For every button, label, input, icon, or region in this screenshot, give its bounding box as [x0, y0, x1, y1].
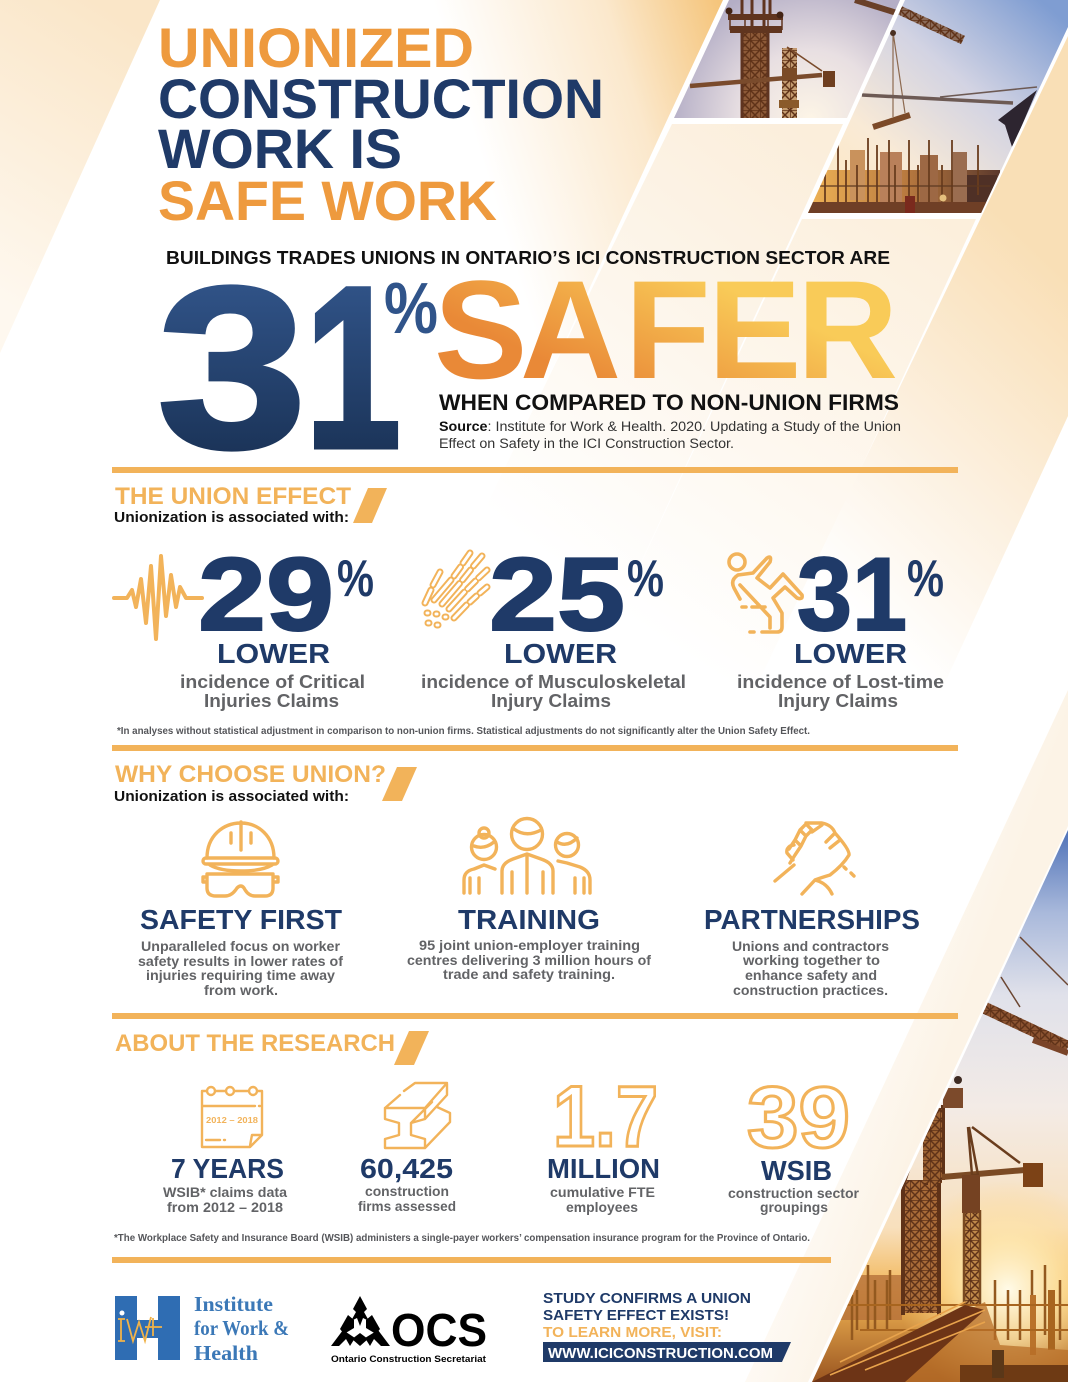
logo: Institute for Work and Health: for Work &	[194, 1316, 289, 1340]
footnote: WSIB definition: *The Workplace Safety and Insurance Board (WSIB) administers a single-payer workers’ compensation insurance program for the Province of Ontario.	[114, 1233, 810, 1244]
call to action: WWW.ICICONSTRUCTION.COM	[548, 1346, 773, 1362]
stat: 29% lower critical injuries	[114, 537, 374, 711]
call to action: TO LEARN MORE, VISIT:	[543, 1325, 722, 1341]
stat: 1.7 million: 1.7	[553, 1069, 658, 1165]
panel: safety first: from work.	[204, 982, 278, 998]
icon: hard hat and goggles	[203, 822, 278, 896]
section heading: why choose union: WHY CHOOSE UNION?	[115, 761, 386, 788]
stat: 1.7 million: MILLION	[547, 1153, 660, 1184]
stat: 29% lower critical injuries: 29	[198, 537, 334, 653]
photo: crane lifting a beam over building site	[805, 0, 1068, 215]
stat: firms assessed: firms assessed	[358, 1198, 456, 1214]
panel: partnerships	[704, 823, 920, 998]
icon: seismic pulse	[114, 556, 202, 639]
panel: training	[407, 818, 651, 982]
logo: Institute for Work and Health	[115, 1292, 289, 1365]
stat: 1.7 million: cumulative FTE	[550, 1184, 655, 1200]
call to action: SAFETY EFFECT EXISTS!	[543, 1308, 729, 1324]
stat: 25% lower musculoskeletal injuries: LOWER	[504, 638, 617, 669]
stat: firms assessed: construction	[365, 1183, 449, 1199]
stat: 7 years: 2012 – 2018	[206, 1115, 258, 1125]
icon: clasped hands	[775, 823, 854, 894]
stat: 29% lower critical injuries: Injuries Claims	[204, 690, 339, 711]
logo: Ontario Construction Secretariat	[331, 1296, 487, 1365]
panel: training: centres delivering 3 million hours of	[407, 952, 651, 968]
stat: 7 years: WSIB* claims data	[163, 1184, 287, 1200]
panel: partnerships: working together to	[742, 952, 880, 968]
panel: training: trade and safety training.	[443, 966, 615, 982]
stat: 29% lower critical injuries: incidence of Critical	[180, 671, 365, 692]
headline statistic: 31% safer: 1	[305, 239, 401, 496]
stat: 25% lower musculoskeletal injuries: Injury Claims	[491, 690, 611, 711]
panel: partnerships: Unions and contractors	[732, 938, 889, 954]
stat: 7 years	[163, 1087, 287, 1215]
section heading: the union effect: THE UNION EFFECT	[115, 483, 351, 510]
panel: safety first: SAFETY FIRST	[140, 904, 342, 935]
stat: firms assessed	[358, 1083, 456, 1214]
stat: 31% lower lost-time injuries: %	[907, 550, 944, 608]
footnote: statistical adjustment: *In analyses without statistical adjustment in comparison to non-union firms. Statistical adjustments do not significantly alter the Union Safety Effect.	[117, 726, 810, 737]
divider	[112, 745, 958, 751]
divider	[112, 1257, 831, 1263]
stat: 31% lower lost-time injuries: 31	[797, 537, 907, 653]
stat: 1.7 million	[547, 1069, 660, 1215]
photo: cranes at sunset on building site	[800, 825, 1068, 1382]
divider	[112, 1013, 958, 1019]
stat: 29% lower critical injuries: LOWER	[217, 638, 330, 669]
subheading: BUILDINGS TRADES UNIONS IN ONTARIO’S ICI CONSTRUCTION SECTOR ARE	[166, 248, 890, 268]
title: SAFE WORK	[158, 169, 497, 232]
stat: 29% lower critical injuries: %	[337, 550, 374, 608]
stat: 39 WSIB groupings: 39	[747, 1070, 850, 1166]
icon: steel I-beam	[385, 1083, 450, 1148]
section heading: about the research	[115, 1030, 429, 1065]
stat: 31% lower lost-time injuries: LOWER	[794, 638, 907, 669]
icon: calendar	[202, 1087, 262, 1147]
panel: safety first: injuries requiring time away	[146, 967, 335, 983]
title: WORK IS	[158, 117, 402, 180]
logo: Institute for Work and Health: Health	[194, 1341, 258, 1365]
panel: partnerships: enhance safety and	[745, 967, 877, 983]
section heading: why choose union	[114, 761, 417, 805]
stat: 39 WSIB groupings: construction sector	[728, 1185, 860, 1201]
headline statistic: 31% safer: 3	[157, 239, 307, 496]
title: CONSTRUCTION	[158, 67, 604, 130]
logo: Ontario Construction Secretariat: Ontario Construction Secretariat	[331, 1354, 487, 1365]
panel: training: TRAINING	[458, 904, 600, 935]
source note: Effect on Safety in the ICI Construction Sector.	[439, 436, 734, 451]
logo: Ontario Construction Secretariat: OCS	[391, 1304, 487, 1356]
logo: Institute for Work and Health: Institute	[194, 1292, 273, 1316]
divider	[112, 467, 958, 473]
panel: safety first: Unparalleled focus on worker	[141, 938, 341, 954]
photo: tower cranes against sky	[670, 0, 905, 120]
section heading: why choose union: Unionization is associated with:	[114, 788, 349, 805]
call to action	[543, 1291, 791, 1362]
stat: 25% lower musculoskeletal injuries	[421, 537, 686, 711]
headline statistic: 31% safer: SAFER	[434, 251, 898, 408]
stat: 31% lower lost-time injuries	[729, 537, 944, 711]
icon: hand skeleton	[425, 553, 487, 625]
stat: 25% lower musculoskeletal injuries: 25	[489, 537, 625, 653]
stat: 31% lower lost-time injuries: incidence of Lost-time	[737, 671, 944, 692]
source note: Source: Institute for Work & Health. 2020. Updating a Study of the Union	[439, 419, 901, 434]
section heading: the union effect	[114, 483, 387, 526]
source note	[439, 419, 901, 451]
section heading: the union effect: Unionization is associated with:	[114, 509, 349, 526]
section heading: about the research: ABOUT THE RESEARCH	[115, 1030, 395, 1057]
title	[158, 16, 604, 232]
stat: 1.7 million: employees	[566, 1199, 638, 1215]
call to action: STUDY CONFIRMS A UNION	[543, 1291, 751, 1307]
panel: safety first	[138, 822, 343, 998]
stat: 39 WSIB groupings	[728, 1070, 860, 1215]
stat: 7 years: 7 YEARS	[171, 1153, 284, 1184]
title: UNIONIZED	[158, 16, 474, 79]
icon: three workers	[464, 818, 590, 893]
stat: 7 years: from 2012 – 2018	[167, 1199, 283, 1215]
panel: safety first: safety results in lower rates of	[138, 953, 343, 969]
stat: 39 WSIB groupings: groupings	[760, 1199, 828, 1215]
panel: partnerships: PARTNERSHIPS	[704, 904, 920, 935]
panel: partnerships: construction practices.	[733, 982, 888, 998]
icon: person slipping	[729, 554, 802, 632]
headline statistic: 31% safer	[157, 239, 898, 496]
comparison line: WHEN COMPARED TO NON-UNION FIRMS	[439, 390, 899, 415]
stat: 31% lower lost-time injuries: Injury Claims	[778, 690, 898, 711]
stat: firms assessed: 60,425	[360, 1153, 453, 1184]
stat: 39 WSIB groupings: WSIB	[761, 1155, 832, 1186]
headline statistic: 31% safer: %	[384, 269, 438, 349]
panel: training: 95 joint union-employer training	[419, 937, 640, 953]
stat: 25% lower musculoskeletal injuries: incidence of Musculoskeletal	[421, 671, 686, 692]
stat: 25% lower musculoskeletal injuries: %	[627, 550, 664, 608]
